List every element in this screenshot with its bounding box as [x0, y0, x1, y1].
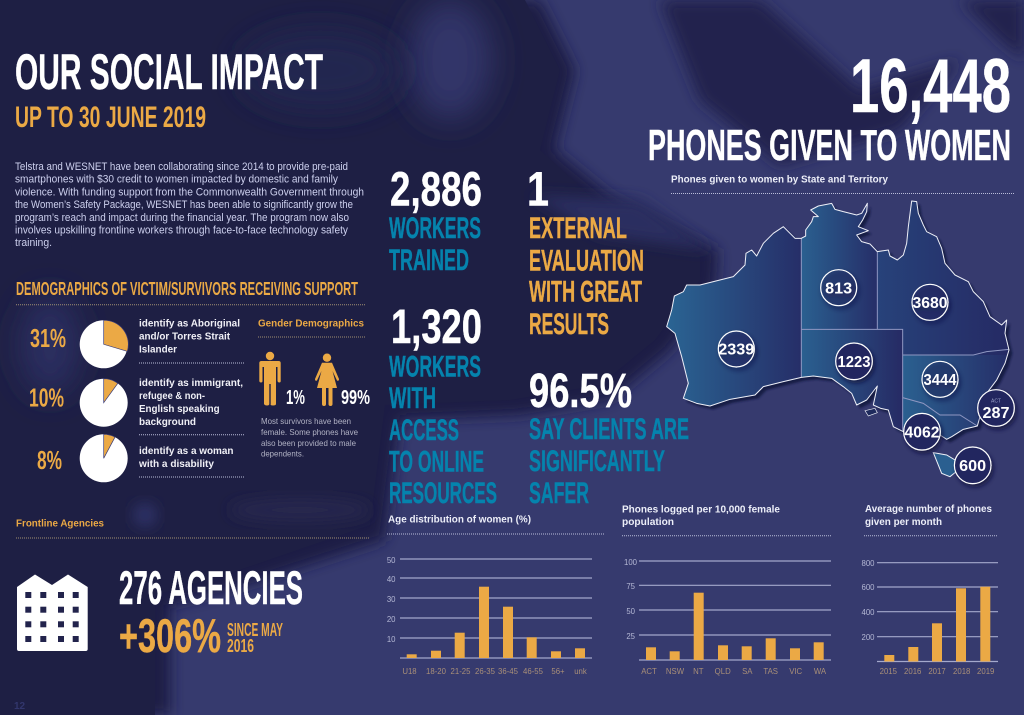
stat: external evaluation: EXTERNAL: [529, 212, 627, 245]
marker: QLD: 3680: [912, 295, 948, 312]
heading: frontline agencies: Frontline Agencies: [16, 518, 104, 530]
stat: workers trained: 2,886: [390, 164, 482, 216]
marker: NT: [821, 270, 857, 306]
marker: NSW: 3444: [924, 372, 957, 389]
stat: 31 percent: 31%: [30, 323, 66, 353]
stat: online resources: TO ONLINE: [389, 446, 484, 479]
intro paragraph: smartphones with $30 credit to women impacted by domestic and family: [15, 174, 339, 186]
chart: phones per month: 2015: [880, 667, 898, 676]
chart: age distribution: 46-55: [523, 667, 544, 676]
stat: clients safer: [529, 365, 689, 510]
panel: gender demographics: [258, 318, 370, 458]
heading: phones logged: population: [622, 516, 674, 528]
intro paragraph: program’s reach and impact during the financial year. The program now also: [15, 212, 349, 224]
label: immigrant: identify as immigrant,: [139, 378, 243, 389]
marker: ACT: [978, 390, 1014, 426]
note: survivors: also been provided to male: [261, 438, 356, 448]
chart: age distribution: unk: [574, 667, 587, 676]
intro paragraph: involves upskilling frontline workers through face-to-face technology safety: [15, 224, 349, 236]
stat: growth: +306%: [119, 609, 221, 662]
stat: workers trained: WORKERS: [389, 212, 481, 245]
stat: clients safer: SAFER: [529, 477, 589, 510]
stat: online resources: WITH: [389, 382, 436, 415]
intro paragraph: violence. With funding support from the Commonwealth Government through: [15, 186, 364, 198]
marker: TAS: [954, 447, 991, 484]
chart: phones per 10000: VIC: [789, 667, 803, 676]
heading: average phones: Average number of phones: [865, 503, 992, 515]
intro paragraph: [15, 161, 364, 249]
heading: phones logged: Phones logged per 10,000 female: [622, 503, 780, 515]
chart: phones per 10000: SA: [742, 667, 753, 676]
label: immigrant: refugee & non-: [139, 391, 205, 402]
stat: workers trained: [389, 164, 482, 277]
marker: WA: [718, 331, 754, 367]
label: disability: [138, 446, 234, 470]
chart: age distribution: 56+: [551, 667, 565, 676]
marker: NSW: [922, 361, 958, 397]
chart: age distribution: [387, 514, 605, 676]
marker: VIC: 4062: [904, 424, 940, 441]
icon: man: [259, 352, 281, 406]
stat: 1 percent: 1%: [286, 387, 305, 409]
marker: ACT: 287: [982, 405, 1010, 422]
marker: TAS: 600: [959, 458, 986, 475]
title: OUR SOCIAL IMPACT: [15, 44, 323, 100]
marker: NT: 813: [825, 280, 852, 297]
stat: 10 percent: 10%: [29, 383, 64, 413]
note: since May 2016: 2016: [227, 636, 254, 656]
heading: gender: Gender Demographics: [258, 318, 364, 330]
chart: age distribution: 40: [387, 575, 396, 584]
chart: phones per month: 2019: [977, 667, 994, 676]
stat: online resources: RESOURCES: [389, 477, 497, 510]
chart: phones per 10000: [622, 503, 832, 676]
stat: online resources: WORKERS: [389, 351, 481, 384]
chart: phones per 10000: 75: [626, 582, 636, 591]
note: since May 2016: [227, 620, 283, 656]
icon: buildings: [17, 574, 88, 651]
chart: phones per month: 2016: [904, 667, 921, 676]
chart: phones per 10000: 100: [624, 558, 638, 567]
chart: phones per month: [861, 503, 998, 676]
label: disability: identify as a woman: [139, 446, 234, 457]
chart: phones per 10000: QLD: [715, 667, 731, 676]
chart: age distribution: 21-25: [451, 667, 471, 676]
heading: demographics: DEMOGRAPHICS OF VICTIM/SURVIVORS RECEIVING SUPPORT: [16, 279, 358, 299]
note: survivors: dependents.: [261, 448, 304, 458]
chart: phones per 10000: NSW: [666, 667, 685, 676]
icon: woman: [315, 354, 339, 406]
marker: SA: [836, 343, 872, 380]
chart: phones per 10000: ACT: [641, 667, 657, 676]
label: Aboriginal: Islander: [139, 344, 177, 355]
stat: external evaluation: 1: [527, 164, 549, 216]
heading: map: Phones given to women by State and Territory: [671, 175, 888, 186]
panel: demographics: [29, 319, 244, 482]
map: Australia: [660, 197, 1014, 484]
stat: workers trained: TRAINED: [389, 244, 469, 277]
stat: external evaluation: WITH GREAT: [529, 276, 642, 309]
stat: external evaluation: [527, 164, 644, 341]
stat: online resources: 1,320: [391, 301, 482, 354]
stat: 8 percent: 8%: [37, 445, 62, 475]
chart: age distribution: 36-45: [498, 667, 519, 676]
chart: phones per 10000: NT: [693, 667, 704, 676]
page number: 12: [14, 701, 26, 712]
note: survivors: Most survivors have been: [261, 416, 351, 426]
intro paragraph: Telstra and WESNET have been collaborating since 2014 to provide pre-paid: [15, 161, 348, 173]
chart: phones per 10000: WA: [814, 667, 827, 676]
pie: 10 percent: [80, 379, 128, 427]
pie: 8 percent: [80, 434, 128, 482]
chart: age distribution: 26-35: [475, 667, 496, 676]
stat: agencies: 276 AGENCIES: [119, 561, 303, 614]
chart: age distribution: U18: [402, 667, 417, 676]
marker: ACT: ACT: [991, 398, 1001, 404]
chart: phones per 10000: 50: [626, 607, 636, 616]
chart: age distribution: 30: [387, 595, 396, 604]
heading: phones logged: [622, 503, 780, 528]
label: immigrant: English speaking: [139, 404, 220, 415]
marker: SA: 1223: [838, 354, 871, 371]
note: since May 2016: SINCE MAY: [227, 620, 283, 640]
stat: clients safer: 96.5%: [529, 365, 632, 418]
heading: average phones: [865, 503, 992, 528]
intro paragraph: the Women’s Safety Package, WESNET has been able to significantly grow the: [15, 199, 353, 211]
label: Aboriginal: and/or Torres Strait: [139, 332, 231, 342]
marker: WA: 2339: [718, 342, 754, 359]
stat: external evaluation: EVALUATION: [529, 244, 644, 278]
note: survivors: [261, 416, 358, 458]
chart: phones per month: 800: [861, 559, 875, 568]
heading: age: Age distribution of women (%): [388, 514, 531, 526]
stat: clients safer: SAY CLIENTS ARE: [529, 413, 689, 446]
stat: clients safer: SIGNIFICANTLY: [529, 445, 665, 478]
chart: phones per month: 2017: [928, 667, 946, 676]
chart: phones per month: 2018: [953, 667, 970, 676]
stat: external evaluation: RESULTS: [529, 308, 609, 341]
chart: age distribution: 10: [387, 635, 396, 644]
chart: age distribution: 20: [387, 615, 396, 624]
marker: VIC: [904, 413, 940, 450]
marker: QLD: [912, 284, 948, 320]
label: disability: with a disability: [138, 459, 214, 470]
chart: phones per 10000: 25: [626, 632, 636, 641]
chart: phones per month: 400: [861, 608, 875, 617]
heading: average phones: given per month: [865, 516, 942, 528]
intro paragraph: training.: [15, 237, 52, 249]
chart: age distribution: 18-20: [426, 667, 447, 676]
stat: 99 percent: 99%: [341, 387, 370, 409]
chart: phones per month: 600: [861, 583, 875, 592]
label: immigrant: background: [139, 417, 196, 428]
chart: phones per 10000: TAS: [763, 667, 778, 676]
stat: online resources: [389, 301, 497, 510]
stat: online resources: ACCESS: [389, 414, 459, 447]
label: Aboriginal: identify as Aboriginal: [139, 319, 240, 330]
pie: 31 percent: [80, 320, 128, 368]
chart: age distribution: 50: [387, 556, 396, 565]
map shape: [660, 197, 1013, 477]
subtitle: UP TO 30 JUNE 2019: [15, 101, 206, 134]
label: immigrant: [139, 378, 243, 428]
chart: phones per month: 200: [861, 633, 875, 642]
note: survivors: female. Some phones have: [261, 427, 358, 437]
label: Aboriginal: [139, 319, 240, 355]
